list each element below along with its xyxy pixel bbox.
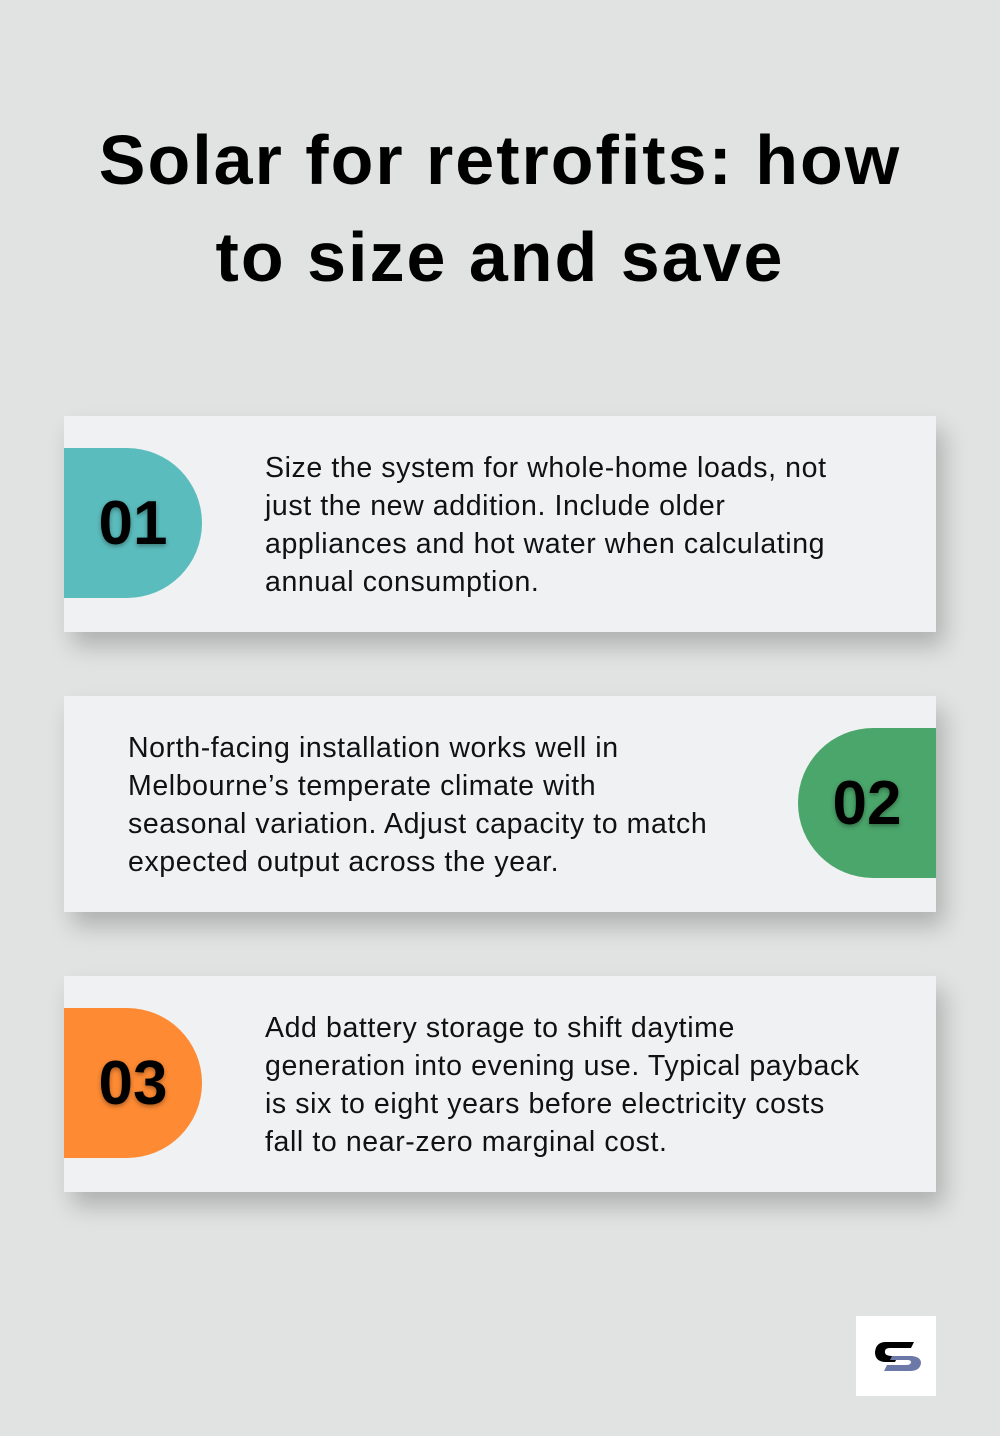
text 03: generation into evening use. Typical payback [265, 1050, 860, 1082]
badge 01: 01 [99, 488, 167, 558]
text 03: Add battery storage to shift daytime [265, 1012, 735, 1044]
text 03: fall to near-zero marginal cost. [265, 1126, 668, 1158]
text 01: Size the system for whole-home loads, not [265, 452, 827, 484]
badge 03 [64, 1008, 202, 1158]
badge 02: 02 [833, 768, 901, 838]
text 03: is six to eight years before electricity costs [265, 1088, 825, 1120]
text 02 [128, 732, 707, 878]
text 03 [265, 1012, 860, 1158]
badge 02 [798, 728, 936, 878]
logo [856, 1316, 936, 1396]
text 01: just the new addition. Include older [265, 490, 725, 522]
panel: step 01 [64, 416, 936, 632]
text 02: North-facing installation works well in [128, 732, 619, 764]
panel: step 03 [64, 976, 936, 1192]
text 01 [264, 452, 827, 598]
title: Solar for retrofits: how [99, 121, 901, 199]
badge 01 [64, 448, 202, 598]
title: to size and save [216, 218, 784, 296]
text 02: expected output across the year. [128, 846, 559, 878]
panel: step 02 [64, 696, 936, 912]
text 01: appliances and hot water when calculating [265, 528, 825, 560]
badge 03: 03 [99, 1048, 167, 1118]
text 02: Melbourne’s temperate climate with [128, 770, 596, 802]
title [99, 121, 901, 296]
text 01: annual consumption. [265, 566, 539, 598]
text 02: seasonal variation. Adjust capacity to match [128, 808, 707, 840]
